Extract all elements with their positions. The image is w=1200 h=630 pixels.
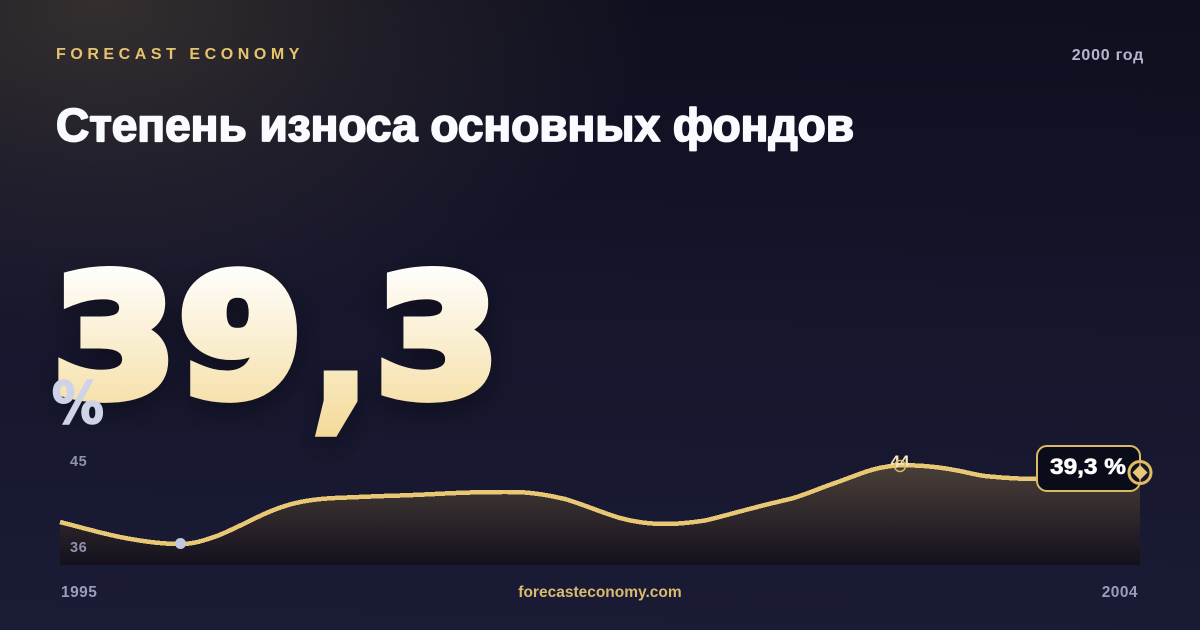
x axis start year: 1995 (61, 584, 97, 601)
chart line (60, 465, 1040, 544)
big value: 9 (179, 242, 302, 434)
year label: 2000 год (1072, 47, 1144, 64)
big value (53, 237, 499, 452)
big value: , (309, 237, 372, 452)
chart: area and line (60, 465, 1140, 565)
max point marker with label: 44 (891, 452, 910, 471)
big value: 3 (376, 242, 499, 434)
current value callout (1037, 446, 1140, 491)
source url: forecasteconomy.com (518, 584, 682, 601)
big value: 3 (53, 242, 176, 434)
brand label: FORECAST ECONOMY (56, 46, 304, 63)
axis label min: 36 (70, 540, 87, 556)
x axis end year: 2004 (1102, 584, 1138, 601)
chart area fill (60, 465, 1140, 565)
title: Степень износа основных фондов (56, 99, 854, 151)
current point marker (1129, 462, 1151, 484)
axis label max: 45 (70, 454, 87, 470)
unit percent: % (52, 370, 104, 438)
current value callout: 39,3 % (1050, 454, 1126, 479)
min point marker (175, 538, 186, 549)
